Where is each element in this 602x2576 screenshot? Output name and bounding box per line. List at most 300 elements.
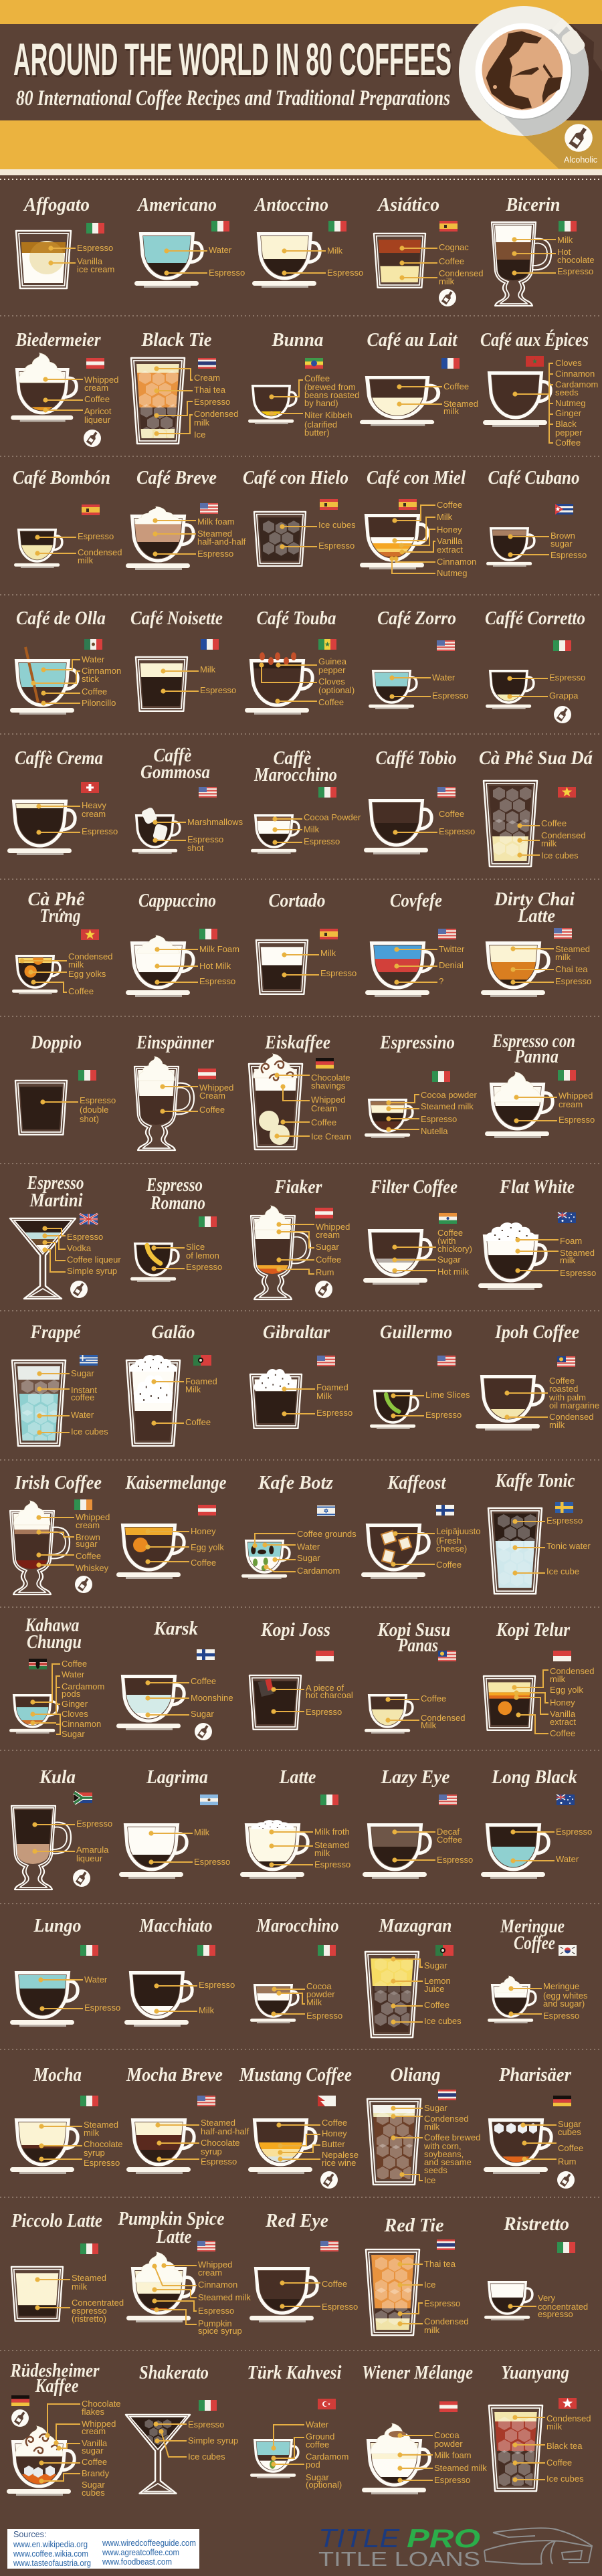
labels: Coffee (437, 500, 462, 510)
labels: Vanilla (437, 536, 463, 546)
labels (284, 1382, 353, 1418)
labels: Egg yolks (68, 969, 106, 979)
labels: Espresso (327, 268, 363, 278)
labels: Ice cubes (318, 520, 356, 530)
tall glass (483, 781, 557, 866)
cup (486, 529, 542, 567)
labels: Espresso (77, 243, 113, 253)
title: Marocchino (256, 1915, 338, 1936)
cup (484, 2120, 562, 2174)
labels: Coffee (443, 381, 469, 391)
title: Macchiato (139, 1915, 213, 1936)
title: Latte (279, 1766, 316, 1788)
cup (363, 1231, 441, 1285)
labels: Ice cubes (188, 2452, 225, 2462)
cup (248, 2120, 326, 2174)
labels: Cocoa Powder (304, 812, 361, 822)
title: Kaffeost (387, 1472, 446, 1493)
glass (483, 1676, 552, 1730)
labels: Cinnamon (82, 666, 121, 676)
labels (392, 500, 476, 578)
labels: Ice (424, 2175, 435, 2185)
labels: ? (439, 976, 443, 986)
labels (510, 531, 587, 560)
labels: Ice Cream (311, 1131, 351, 1141)
labels: Espresso (434, 2475, 470, 2485)
cup (126, 935, 204, 997)
labels: Chocolate (82, 2399, 121, 2409)
cup (126, 2120, 205, 2174)
labels: Milk (304, 824, 320, 834)
icon: alcoholic (75, 1576, 92, 1593)
labels: Whipped (199, 1083, 233, 1093)
icon: alcoholic legend: Alcoholic (564, 155, 597, 165)
title: Pharisäer (498, 2064, 572, 2086)
labels (393, 1390, 470, 1420)
labels: Water (82, 654, 105, 664)
cup (116, 1677, 195, 1730)
labels (272, 1827, 350, 1869)
flag (320, 2241, 338, 2251)
labels (395, 1827, 473, 1865)
flag (318, 639, 336, 650)
coffee: Latte (240, 1766, 350, 1879)
labels: Coffee (436, 1560, 462, 1570)
coffee: Bicerin (491, 194, 595, 306)
tall glass (488, 1508, 561, 1594)
flag (80, 1355, 98, 1366)
labels: Honey (550, 1697, 575, 1708)
cup (483, 373, 561, 427)
labels: Ice cubes (546, 2474, 584, 2484)
flag (197, 1945, 215, 1956)
title: Covfefe (390, 890, 442, 911)
title: Doppio (30, 1032, 82, 1053)
labels (155, 2260, 251, 2336)
labels: Espresso (194, 397, 230, 407)
flag (199, 787, 217, 798)
coffee: Frappé (11, 1321, 108, 1447)
header banner (0, 0, 602, 175)
title: Kopi Susu (377, 1619, 451, 1641)
flag (438, 2090, 456, 2100)
labels: Thai tea (424, 2259, 456, 2269)
coffee: Einspänner (134, 1032, 233, 1150)
labels: Amarula (76, 1845, 109, 1855)
coffee: Lungo (10, 1915, 120, 2027)
labels: (Fresh (436, 1536, 462, 1546)
coffee: Lagrima (119, 1766, 230, 1879)
labels: Cream (311, 1103, 337, 1113)
labels: Black (555, 419, 577, 429)
labels (514, 235, 595, 276)
labels: Coffee (311, 1117, 336, 1127)
title (27, 1172, 84, 1211)
labels: Water (306, 2419, 329, 2429)
labels (393, 1959, 462, 2026)
labels: Whipped (559, 1091, 593, 1101)
cup (14, 530, 70, 568)
labels: Hot (557, 247, 571, 257)
labels: Coffee (424, 2000, 449, 2010)
coffee: Wiener Mélange (362, 2362, 487, 2494)
labels: pods (62, 1689, 81, 1699)
title: Café Touba (257, 608, 336, 629)
title: Coffee (514, 1932, 555, 1954)
labels: pepper (318, 665, 346, 675)
cup (478, 1222, 557, 1290)
labels: powder (306, 1989, 335, 1999)
labels: Guinea (318, 656, 347, 666)
labels: espresso (538, 2309, 573, 2319)
labels: Cloves (318, 676, 345, 686)
labels: (with (437, 1236, 456, 1246)
labels: cream (82, 809, 106, 819)
labels: Espresso (557, 266, 593, 276)
title: Cà Phê (28, 889, 85, 910)
coffee: Café de Olla (10, 608, 121, 715)
labels: milk (550, 1674, 566, 1684)
title: Café Bombón (13, 467, 110, 488)
labels: Espresso (421, 1114, 457, 1124)
labels: milk (555, 952, 571, 962)
icon: alcoholic (73, 1869, 90, 1887)
title: Caffè (154, 745, 192, 766)
labels: Espresso (188, 2419, 224, 2429)
labels: extract (550, 1717, 576, 1727)
labels: Coffee (82, 686, 107, 697)
labels: powder (434, 2439, 463, 2449)
labels: Water (432, 672, 456, 682)
labels (277, 1073, 351, 1141)
glass (256, 940, 324, 994)
labels: Steamed (84, 2120, 118, 2130)
cup (360, 515, 438, 569)
labels: Meringue (543, 1981, 579, 1991)
title: Ipoh Coffee (494, 1321, 579, 1343)
labels: of lemon (186, 1251, 219, 1261)
cup (7, 2426, 85, 2496)
labels: Condensed (424, 2316, 468, 2326)
flag (320, 1795, 338, 1805)
icon: alcoholic (195, 1723, 212, 1740)
flag (305, 358, 323, 369)
title: Kaffe Tonic (495, 1470, 575, 1491)
labels: (optional) (306, 2480, 342, 2490)
labels: Foamed (185, 1376, 217, 1386)
coffee: Macchiato (124, 1915, 235, 2027)
labels: Espresso (432, 691, 468, 701)
glass (11, 1806, 84, 1890)
tall glass (130, 357, 186, 444)
flag (200, 1795, 218, 1805)
labels: Thai tea (194, 385, 226, 395)
cup (370, 1391, 425, 1429)
labels: Coffee (68, 986, 94, 996)
title (25, 1615, 82, 1653)
coffee: Gibraltar (249, 1321, 353, 1429)
labels: Sugar (297, 1553, 320, 1563)
flag (11, 2395, 29, 2406)
cup (10, 1972, 88, 2027)
labels: Condensed (541, 830, 586, 840)
labels: Espresso (439, 826, 475, 836)
title: Kopi Telur (496, 1619, 571, 1641)
labels: Water (297, 1542, 320, 1552)
coffee: Cà Phê Trứng (12, 889, 113, 996)
labels: Coffee (437, 1228, 463, 1238)
flag (438, 1651, 456, 1661)
cup (116, 1526, 195, 1579)
coffee: Mocha (10, 2064, 123, 2174)
title: Marocchino (254, 764, 337, 786)
flag (318, 1945, 336, 1956)
flag (553, 2096, 571, 2106)
martini glass (9, 1218, 83, 1299)
labels: Honey (191, 1526, 216, 1536)
labels: Niter Kibbeh (304, 410, 353, 420)
coffee: Black Tie (130, 329, 238, 444)
labels: Chocolate (84, 2139, 123, 2149)
labels: cream (559, 1099, 583, 1109)
labels: Espresso (84, 2158, 120, 2168)
coffee: Café Cubano (486, 467, 587, 567)
labels: Vanilla (550, 1709, 576, 1719)
title: Espresso (27, 1172, 84, 1194)
labels: Coffee (318, 697, 344, 707)
labels (282, 2279, 358, 2312)
glass (11, 2267, 80, 2321)
title: Lagrima (146, 1766, 208, 1788)
labels: concentrated (538, 2302, 588, 2312)
icon: alcoholic (70, 1281, 88, 1298)
labels (148, 1676, 233, 1719)
labels: Water (62, 1669, 85, 1679)
labels: shavings (311, 1081, 346, 1091)
labels: milk (78, 555, 94, 565)
labels: Ice cubes (541, 850, 579, 860)
labels (399, 381, 478, 416)
icon: alcoholic (11, 2409, 29, 2427)
labels: Coffee (62, 1659, 87, 1669)
coffee: Espressino (365, 1032, 477, 1138)
labels (284, 948, 357, 978)
labels (400, 2430, 487, 2485)
cup (486, 671, 541, 709)
labels (37, 531, 122, 565)
labels: Steamed (197, 529, 232, 539)
labels: Sugar (82, 2480, 105, 2490)
labels: with corn, (423, 2141, 462, 2151)
labels: Rum (316, 1267, 334, 1277)
title: Lungo (33, 1915, 82, 1936)
labels: Espresso (437, 1855, 473, 1865)
title: Cappuccino (138, 890, 216, 911)
coffee: Caffè Gommosa (132, 745, 243, 854)
labels (279, 2118, 359, 2168)
title: Romano (150, 1192, 205, 1214)
labels (158, 2118, 249, 2167)
labels: Milk (185, 1384, 201, 1394)
labels (272, 373, 359, 438)
title: Frappé (30, 1321, 81, 1343)
flag (557, 1795, 575, 1805)
title: Mustang Coffee (239, 2064, 352, 2086)
labels: Milk (327, 246, 343, 256)
labels: milk (439, 276, 455, 286)
labels: coffee (306, 2440, 329, 2450)
title: Kaffee (35, 2375, 79, 2397)
labels: ice cream (77, 264, 114, 274)
coffee: Fiaker (250, 1176, 350, 1299)
cup (476, 1377, 554, 1431)
title (140, 745, 210, 783)
coffee: Café Touba (245, 608, 355, 715)
labels: Cocoa powder (421, 1090, 477, 1100)
title: Guillermo (380, 1321, 452, 1343)
labels: Milk (199, 2005, 215, 2015)
coffee: Galão (126, 1321, 217, 1446)
labels: Espresso (320, 968, 357, 978)
title: Kopi Joss (260, 1619, 330, 1641)
tall glass (488, 2405, 562, 2491)
coffee: Kaffe Tonic (488, 1470, 591, 1594)
glass (15, 1081, 84, 1135)
labels: Nutmeg (555, 398, 586, 408)
labels: Espresso (187, 834, 223, 844)
labels (45, 375, 118, 425)
labels: sugar (76, 1539, 98, 1549)
icon: alcoholic (439, 289, 456, 306)
labels: shot) (80, 1114, 99, 1124)
flag (318, 2399, 336, 2409)
flag (553, 640, 571, 651)
flag (80, 1945, 98, 1956)
title (146, 1174, 205, 1214)
labels: Cream (194, 373, 220, 383)
coffee: Irish Coffee (9, 1472, 110, 1594)
sources box: www.wiredcoffeeguide.com (102, 2539, 196, 2548)
labels: Espresso (197, 549, 233, 559)
flag (558, 787, 576, 798)
flag (86, 223, 104, 234)
labels (157, 944, 239, 986)
labels: milk (68, 959, 84, 970)
flag (557, 2242, 575, 2253)
coffee: Café au Lait (360, 329, 478, 426)
labels: Steamed (72, 2273, 106, 2283)
coffee: Dirty Chai Latte (481, 889, 591, 997)
labels: A piece of (306, 1683, 344, 1693)
flag (193, 1355, 211, 1366)
labels: Coffee brewed (424, 2132, 480, 2142)
labels (274, 2419, 348, 2490)
labels: Espresso (80, 1095, 116, 1105)
cup (481, 943, 559, 997)
coffee: Cappuccino (126, 890, 239, 997)
labels (284, 246, 363, 278)
title: Pumpkin Spice (118, 2208, 225, 2229)
labels (393, 1526, 480, 1570)
title: Rüdesheimer (10, 2360, 100, 2381)
labels: cream (76, 1520, 100, 1530)
title (494, 889, 575, 927)
flag (199, 929, 217, 939)
title: Kula (39, 1766, 76, 1788)
title: Americano (136, 194, 217, 215)
flag (80, 2096, 98, 2106)
labels (22, 951, 112, 996)
labels: Apricot (84, 406, 112, 416)
labels: pepper (555, 428, 583, 438)
title: Martini (29, 1190, 83, 1211)
labels: Grappa (549, 691, 579, 701)
labels: Espresso (559, 1115, 595, 1125)
coffee: Lazy Eye (363, 1766, 473, 1879)
labels: cream (84, 383, 108, 393)
title: Café Noisette (130, 608, 223, 629)
labels: Espresso (199, 1980, 235, 1990)
title: Caffè Crema (15, 747, 103, 769)
labels: Coffee (191, 1558, 216, 1568)
labels (154, 1242, 222, 1272)
labels: Sugar (558, 2119, 581, 2129)
labels (510, 2293, 588, 2319)
flag (559, 1945, 577, 1956)
labels: Espresso (199, 976, 235, 986)
flag (553, 1651, 571, 1661)
labels: Coffee (191, 1676, 216, 1686)
labels: Cardamom (62, 1681, 104, 1691)
labels (37, 2273, 124, 2324)
sources box: Sources: (13, 2530, 46, 2539)
labels: Cream (199, 1091, 225, 1101)
flag (558, 1070, 576, 1081)
labels (515, 1515, 591, 1576)
labels (33, 654, 121, 708)
coffee: Mazagran (365, 1915, 462, 2037)
title: Shakerato (139, 2362, 209, 2383)
labels: Brandy (82, 2468, 110, 2478)
labels: Whipped (311, 1095, 345, 1105)
coffee: Karsk (116, 1618, 233, 1740)
labels: Coffee (84, 394, 110, 404)
labels: cubes (82, 2488, 105, 2498)
title (377, 1619, 451, 1656)
coffee: Asiático (373, 194, 483, 306)
labels: syrup (84, 2148, 105, 2158)
labels: milk (194, 418, 210, 428)
flag (557, 1356, 575, 1367)
labels: cheese) (436, 1544, 467, 1554)
coffee: Caffè Crema (7, 747, 118, 855)
title: Gibraltar (263, 1321, 330, 1343)
labels: Very (538, 2293, 556, 2303)
labels: Coffee (199, 1105, 225, 1115)
title: Fiaker (274, 1176, 322, 1198)
coffee: Guillermo (370, 1321, 470, 1429)
labels: Coffee (558, 2143, 583, 2153)
labels: Espresso (550, 550, 587, 560)
labels: Condensed (439, 268, 483, 278)
cup (7, 802, 86, 855)
labels: chocolate (557, 255, 595, 265)
coffee: Kopi Susu Panas (365, 1619, 466, 1734)
labels (515, 2413, 591, 2484)
title: Café Zorro (377, 608, 456, 629)
glass (373, 233, 427, 288)
labels: Coffee (437, 1835, 462, 1845)
